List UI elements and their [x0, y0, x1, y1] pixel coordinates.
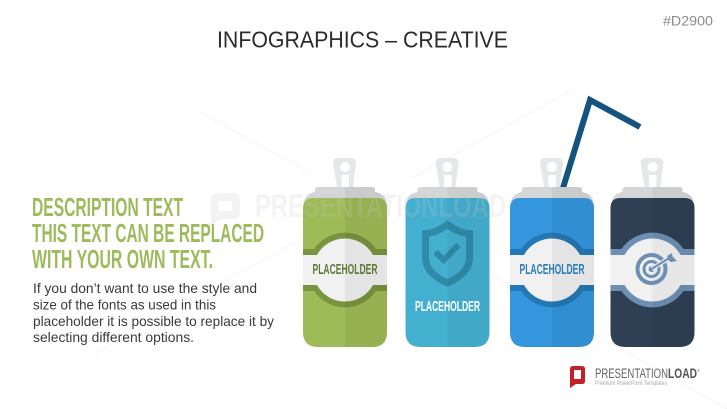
- label: PLACEHOLDER: [312, 262, 378, 278]
- logo: PresentationLoad: [570, 366, 700, 388]
- description heading: DESCRIPTION TEXT: [32, 194, 183, 222]
- description heading: WITH YOUR OWN TEXT.: [32, 246, 213, 274]
- title: INFOGRAPHICS – CREATIVE: [217, 26, 508, 52]
- label: PLACEHOLDER: [415, 299, 480, 315]
- description body text: If you don’t want to use the style and: [33, 280, 257, 296]
- logo: PresentationLoad: ®: [697, 368, 700, 373]
- description body text: placeholder it is possible to replace it by: [33, 313, 274, 329]
- logo text: PRESENTATION: [595, 366, 668, 381]
- can 3: blue: [510, 158, 594, 347]
- label: PLACEHOLDER: [520, 262, 585, 278]
- watermark: [211, 188, 506, 225]
- logo: PresentationLoad: Premium PowerPoint Templates: [595, 380, 668, 387]
- description body text: size of the fonts as used in this: [33, 296, 216, 312]
- slide code: #D2900: [663, 13, 713, 29]
- icon: shield with check: [426, 224, 470, 283]
- description body text: selecting different options.: [33, 329, 194, 345]
- description body text: [33, 280, 274, 345]
- description heading: THIS TEXT CAN BE REPLACED: [32, 220, 264, 248]
- icon: target with arrow: [638, 253, 677, 283]
- watermark: PRESENTATIONLOAD: [255, 188, 506, 224]
- straw: [563, 100, 640, 188]
- can 2: teal with shield: [406, 158, 490, 347]
- can 1: green: [303, 158, 387, 347]
- can 4: navy with target: [610, 158, 694, 347]
- description heading: [32, 194, 264, 274]
- logo mark: [570, 366, 585, 388]
- logo: PresentationLoad: LOAD: [668, 366, 697, 381]
